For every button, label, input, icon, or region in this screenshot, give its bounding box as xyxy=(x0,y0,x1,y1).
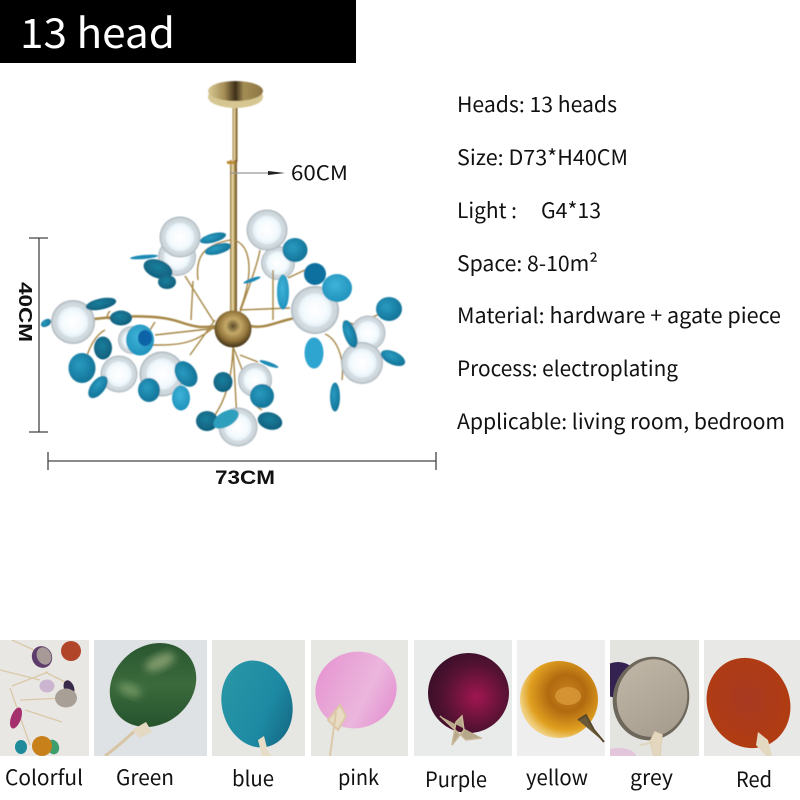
colour swatch: blue: blue xyxy=(232,763,274,793)
colour swatch: yellow: yellow xyxy=(526,762,588,792)
behind globes xyxy=(118,238,295,354)
colour swatch: purple xyxy=(414,640,512,794)
spec: process: Process: electroplating xyxy=(457,353,678,383)
globe xyxy=(238,363,272,397)
colour swatch: red: Red xyxy=(736,764,772,794)
colour swatch: grey: grey xyxy=(630,762,673,792)
centre sphere xyxy=(214,310,252,348)
stem xyxy=(227,108,238,330)
height dimension 40CM: 40CM xyxy=(15,282,35,342)
ceiling plate xyxy=(208,81,263,108)
60CM hanging length callout xyxy=(230,157,348,186)
globe xyxy=(218,408,258,446)
colour swatch: red xyxy=(692,640,800,794)
spec: heads: Heads: 13 heads xyxy=(457,89,617,119)
width dimension 73CM: 73CM xyxy=(215,468,275,489)
spec: light: Light : xyxy=(457,195,517,225)
colour swatch: pink xyxy=(304,640,408,792)
blue agate leaves xyxy=(39,230,408,432)
colour swatch: green: Green xyxy=(116,762,174,792)
width dimension 73CM xyxy=(48,452,436,489)
globe xyxy=(100,356,138,392)
colour swatch: colorful xyxy=(0,640,89,792)
chandelier illustration xyxy=(39,81,408,446)
globe xyxy=(291,286,339,334)
spec: applicable: Applicable: living room, bedroom xyxy=(457,406,785,436)
globe xyxy=(160,216,200,258)
title banner: 13 head xyxy=(20,0,175,60)
spec: light: G4*13 xyxy=(541,195,601,225)
colour swatch: blue xyxy=(212,640,305,793)
colour swatch: grey xyxy=(598,640,699,792)
title banner xyxy=(0,0,356,63)
specifications list xyxy=(457,89,785,436)
spec: size: Size: D73*H40CM xyxy=(457,142,628,172)
colour swatch: purple: Purple xyxy=(425,764,487,794)
height dimension 40CM xyxy=(15,238,48,432)
spec: space: Space: 8-10m² xyxy=(457,248,598,278)
globe xyxy=(341,342,383,384)
colour swatch: colorful: Colorful xyxy=(5,762,83,792)
60CM hanging length callout: 60CM xyxy=(291,157,348,186)
colour swatch: green xyxy=(93,626,213,792)
globe xyxy=(140,352,184,396)
gold branches xyxy=(86,240,385,420)
globe xyxy=(51,300,95,344)
globe xyxy=(246,210,288,250)
spec: material: Material: hardware + agate piece xyxy=(457,300,781,330)
spec: light xyxy=(457,195,601,225)
globe xyxy=(350,316,386,350)
colour swatch: yellow xyxy=(517,640,605,792)
colour swatch: pink: pink xyxy=(338,762,379,792)
